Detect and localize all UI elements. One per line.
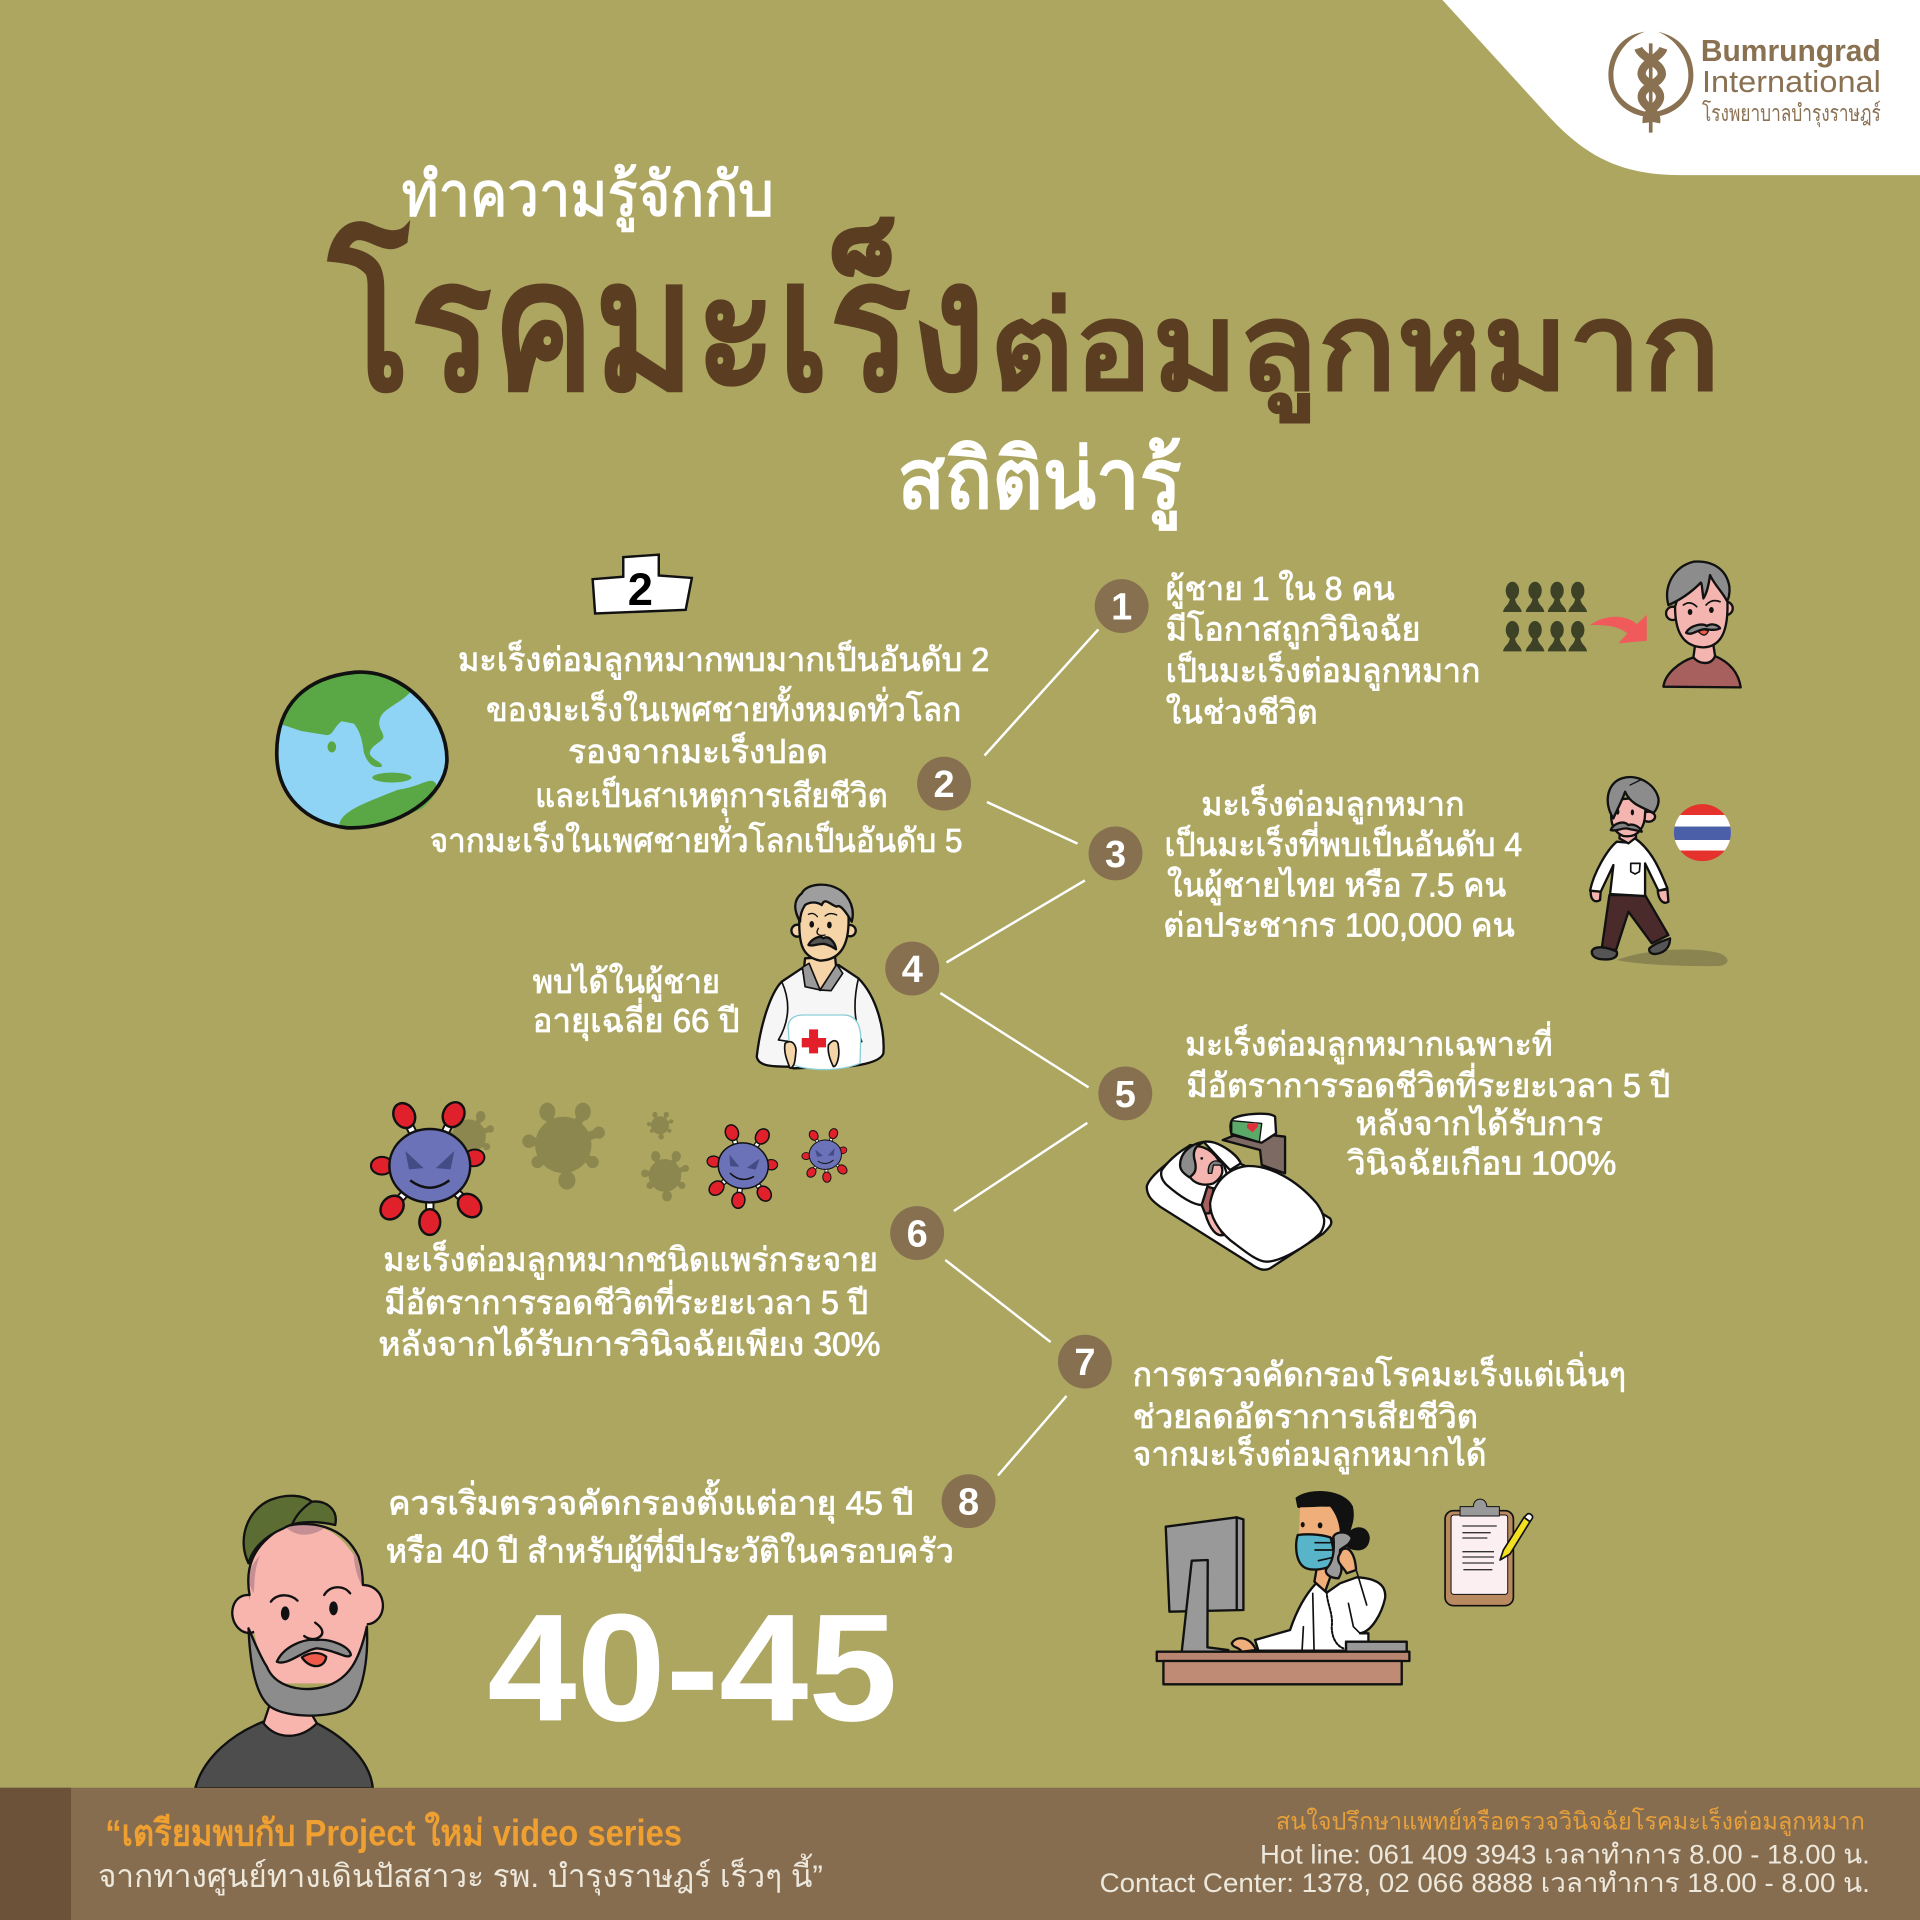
white logo corner — [1442, 0, 1920, 175]
text: stat 5 — [1185, 1022, 1670, 1182]
number 2: 2 — [934, 764, 955, 806]
footer subline: จากทางศูนย์ทางเดินปัสสาวะ รพ. บำรุงราษฎร์ เร็วๆ นี้” — [98, 1853, 823, 1896]
text: stat 8: หรือ 40 ปี สำหรับผู้ที่มีประวัติในครอบครัว — [386, 1528, 954, 1571]
small grey virus — [647, 1112, 673, 1140]
footer contact heading: สนใจปรึกษาแพทย์หรือตรวจวินิจฉัยโรคมะเร็งต่อมลูกหมาก — [1276, 1805, 1865, 1836]
text: stat 3: เป็นมะเร็งที่พบเป็นอันดับ 4 — [1164, 822, 1522, 864]
large grey virus — [522, 1103, 605, 1190]
text: stat 8: ควรเริ่มตรวจคัดกรองตั้งแต่อายุ 45 ปี — [388, 1480, 913, 1524]
icon: patient in bed — [1147, 1114, 1331, 1270]
logo emblem — [1608, 32, 1693, 133]
title: main second part: ต่อมลูกหมาก — [989, 278, 1720, 421]
text: stat 6 — [378, 1240, 880, 1364]
text: stat 8 — [386, 1480, 954, 1571]
text: stat 1: ผู้ชาย 1 ใน 8 คน — [1166, 570, 1395, 609]
text: stat 7: การตรวจคัดกรองโรคมะเร็งแต่เนิ่นๆ — [1133, 1352, 1626, 1394]
text: stat 3 — [1163, 785, 1522, 945]
contact center: Contact Center: 1378, 02 066 8888 เวลาทำการ 18.00 - 8.00 น. — [1100, 1868, 1870, 1898]
number 8 — [942, 1474, 996, 1528]
logo: Bumrungrad International — [1608, 32, 1881, 133]
text: stat 4: อายุเฉลี่ย 66 ปี — [533, 998, 740, 1041]
number 6: 6 — [907, 1214, 928, 1256]
number 2 — [917, 757, 971, 811]
text: stat 2: ของมะเร็งในเพศชายทั้งหมดทั่วโลก — [486, 686, 961, 729]
icon: walking man — [1590, 777, 1728, 966]
number 8: 8 — [958, 1482, 979, 1524]
text: stat 7: ช่วยลดอัตราการเสียชีวิต — [1133, 1399, 1478, 1436]
number 3 — [1089, 827, 1142, 880]
number circles — [885, 579, 1152, 1528]
small blue virus — [800, 1126, 850, 1184]
icon: podium rank 2: 2 — [628, 564, 653, 615]
number 7 — [1058, 1335, 1112, 1389]
icon: globe — [277, 672, 447, 828]
icon: older man with first aid kit — [757, 885, 884, 1070]
title block — [327, 161, 1720, 532]
arrow: red curved — [1590, 615, 1647, 643]
text: stat 2: รองจากมะเร็งปอด — [568, 732, 828, 771]
icon: bearded man with cap — [195, 1496, 383, 1788]
medium blue virus — [701, 1119, 784, 1213]
text: stat 5: หลังจากได้รับการ — [1356, 1105, 1603, 1143]
text: stat 6: มะเร็งต่อมลูกหมากชนิดแพร่กระจาย — [383, 1240, 878, 1280]
text: stat 4: พบได้ในผู้ชาย — [533, 963, 720, 1002]
logo wordmark: International — [1702, 65, 1881, 99]
title: intro line: ทำความรู้จักกับ — [402, 161, 774, 232]
icon: Thai flag — [1673, 803, 1731, 862]
icon: man with shirt — [1663, 562, 1741, 687]
text: stat 6: มีอัตราการรอดชีวิตที่ระยะเวลา 5 ปี — [384, 1280, 868, 1322]
hot line: Hot line: 061 409 3943 เวลาทำการ 8.00 - 18.00 น. — [1260, 1840, 1870, 1870]
text: stat 3: มะเร็งต่อมลูกหมาก — [1201, 785, 1464, 825]
medium grey virus — [641, 1151, 689, 1201]
text: stat 5: มีอัตราการรอดชีวิตที่ระยะเวลา 5 ปี — [1187, 1063, 1670, 1105]
text: stat 3: ในผู้ชายไทย หรือ 7.5 คน — [1167, 866, 1506, 905]
icon: clipboard and pencil — [1445, 1499, 1533, 1606]
text: stat 7 — [1133, 1352, 1626, 1475]
logo wordmark: Bumrungrad — [1701, 34, 1881, 68]
number 5: 5 — [1115, 1074, 1136, 1116]
text: stat 1: มีโอกาสถูกวินิจฉัย — [1166, 610, 1420, 649]
text: stat 5: มะเร็งต่อมลูกหมากเฉพาะที่ — [1185, 1022, 1553, 1065]
number 4 — [885, 942, 939, 996]
text: stat 1: ในช่วงชีวิต — [1166, 694, 1318, 732]
icon: eight people — [1503, 582, 1587, 651]
number 3: 3 — [1105, 834, 1126, 876]
title: main large: โรคมะเร็ง — [327, 216, 986, 428]
large red and blue virus — [371, 1099, 486, 1235]
text: stat 4 — [533, 963, 740, 1041]
number 1 — [1095, 579, 1149, 633]
text: stat 1: เป็นมะเร็งต่อมลูกหมาก — [1166, 651, 1480, 691]
text: stat 3: ต่อประชากร 100,000 คน — [1163, 908, 1515, 945]
text: stat 2: และเป็นสาเหตุการเสียชีวิต — [535, 776, 888, 816]
footer headline: “เตรียมพบกับ Project ใหม่ video series — [105, 1811, 682, 1853]
number 4: 4 — [902, 949, 923, 991]
text: stat 6: หลังจากได้รับการวินิจฉัยเพียง 30% — [378, 1326, 880, 1364]
icon: woman on phone at desk — [1157, 1492, 1409, 1684]
text: stat 5: วินิจฉัยเกือบ 100% — [1346, 1145, 1616, 1182]
icon: podium rank 2 — [593, 555, 692, 615]
footer left text — [98, 1811, 823, 1896]
title: subtitle: สถิติน่ารู้ — [898, 433, 1182, 532]
number 6 — [890, 1206, 944, 1260]
grey virus behind large — [444, 1111, 494, 1163]
logo wordmark — [1701, 34, 1881, 127]
footer right text — [1100, 1805, 1870, 1898]
number 1: 1 — [1111, 587, 1132, 629]
footer bar — [0, 1788, 1920, 1920]
big number 40-45: 40-45 — [487, 1582, 898, 1753]
number 7: 7 — [1074, 1342, 1095, 1384]
text: stat 2 — [430, 640, 989, 860]
number 5 — [1098, 1067, 1152, 1120]
text: stat 1 — [1166, 570, 1480, 732]
connector lines — [940, 629, 1098, 1476]
text: stat 2: จากมะเร็งในเพศชายทั่วโลกเป็นอันดับ 5 — [430, 818, 962, 860]
icon group: viruses — [371, 1099, 850, 1235]
text: stat 2: มะเร็งต่อมลูกหมากพบมากเป็นอันดับ 2 — [458, 640, 989, 680]
text: stat 7: จากมะเร็งต่อมลูกหมากได้ — [1133, 1435, 1487, 1475]
